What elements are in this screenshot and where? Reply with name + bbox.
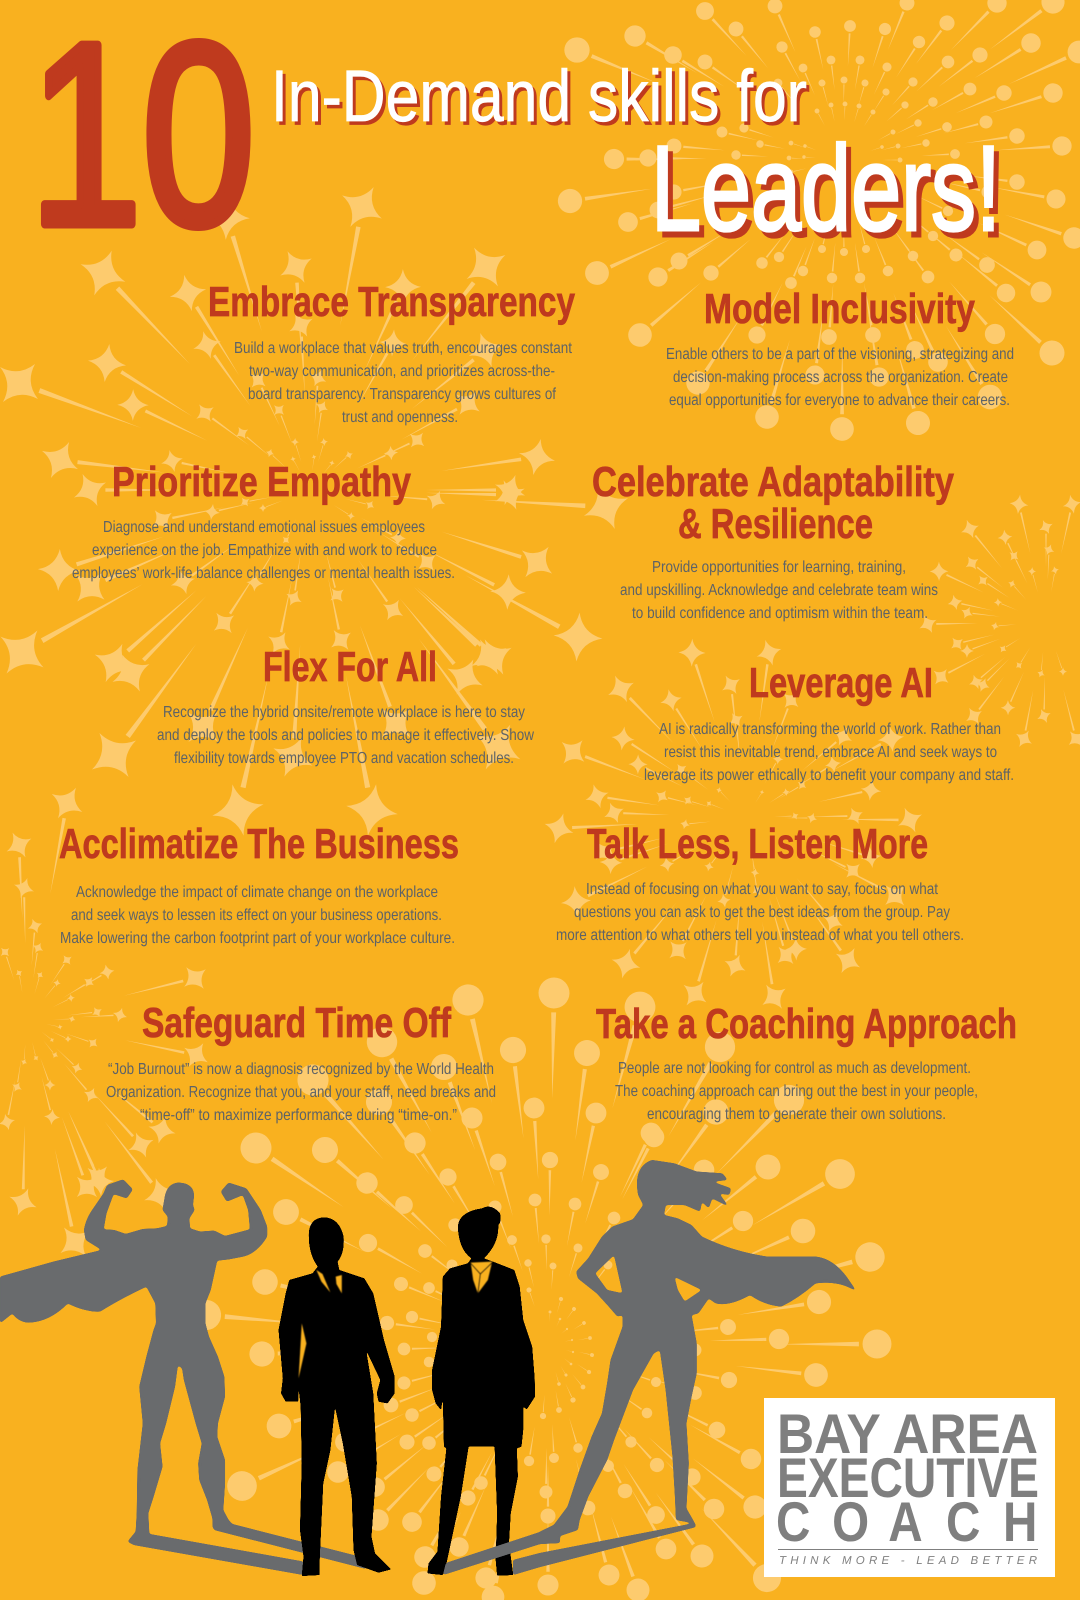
title: In-Demand skills for: In-Demand skills for [271, 56, 807, 137]
panel: Take a Coaching Approach [596, 1000, 1017, 1123]
panel: Model Inclusivity [666, 285, 1014, 409]
panel: Embrace Transparency: Embrace Transparency [208, 278, 576, 325]
logo: Bay Area Executive Coach: COACH [776, 1490, 1037, 1553]
panel: Talk Less, Listen More: Talk Less, Listen More [587, 820, 928, 867]
panel: Leverage AI: leverage its power ethically to benefit your company and staff. [644, 767, 1014, 784]
panel: Model Inclusivity: Model Inclusivity [704, 285, 976, 332]
panel: Prioritize Empathy [72, 458, 455, 582]
panel: Leverage AI [644, 659, 1014, 784]
panel: Acclimatize The Business: Make lowering the carbon footprint part of your workplace culture. [60, 930, 455, 947]
panel: Acclimatize The Business: Acknowledge the impact of climate change on the workplace [76, 884, 438, 901]
panel: Acclimatize The Business [59, 820, 459, 947]
panel: Take a Coaching Approach: encouraging them to generate their own solutions. [647, 1106, 946, 1123]
panel: Prioritize Empathy: Diagnose and understand emotional issues employees [103, 519, 425, 536]
dot burst: upper right [556, 0, 1080, 441]
panel: Embrace Transparency: Build a workplace that values truth, encourages constant [234, 340, 572, 357]
panel: Model Inclusivity: equal opportunities for everyone to advance their careers. [669, 392, 1010, 409]
panel: Acclimatize The Business: and seek ways to lessen its effect on your business operations. [71, 907, 442, 924]
panel: Prioritize Empathy: Prioritize Empathy [112, 458, 412, 505]
panel: Safeguard Time Off: Safeguard Time Off [142, 999, 452, 1046]
title: In-Demand skills for: In-Demand skills for [274, 60, 810, 140]
panel: Talk Less, Listen More [556, 820, 964, 944]
star burst: centre right [539, 630, 928, 1019]
panel: Embrace Transparency: board transparency. Transparency grows cultures of [248, 386, 556, 403]
panel: Safeguard Time Off: “time-off” to maximize performance during “time-on.” [140, 1107, 457, 1124]
panel: Safeguard Time Off: “Job Burnout” is now a diagnosis recognized by the World Health [108, 1061, 494, 1078]
panel: Embrace Transparency [208, 278, 576, 426]
panel: Take a Coaching Approach: The coaching approach can bring out the best in your people, [615, 1083, 978, 1100]
panel: Leverage AI: resist this inevitable trend, embrace AI and seek ways to [664, 744, 997, 761]
panel: Take a Coaching Approach: People are not looking for control as much as development. [618, 1060, 971, 1077]
icon: business man silhouette [279, 1217, 395, 1576]
logo: Bay Area Executive Coach [764, 1398, 1055, 1577]
panel: Safeguard Time Off: Organization. Recognize that you, and your staff, need breaks and [106, 1084, 496, 1101]
panel: Model Inclusivity: decision-making process across the organization. Create [673, 369, 1008, 386]
panel: Celebrate Adaptability and Resilience: Celebrate Adaptability [592, 458, 955, 505]
icon: business woman silhouette [427, 1207, 535, 1576]
icon: caped superhero man silhouette [0, 1179, 368, 1575]
panel: Flex For All: Recognize the hybrid onsite/remote workplace is here to stay [163, 704, 525, 721]
logo: Bay Area Executive Coach: THINK MORE - LEAD BETTER [779, 1555, 1037, 1567]
panel: Acclimatize The Business: Acclimatize The Business [59, 820, 459, 867]
panel: Prioritize Empathy: employees’ work-life balance challenges or mental health issues. [72, 565, 455, 582]
panel: Celebrate Adaptability and Resilience: & Resilience [678, 500, 873, 547]
panel: Flex For All [157, 643, 534, 767]
panel: Model Inclusivity: Enable others to be a part of the visioning, strategizing and [666, 346, 1014, 363]
panel: Celebrate Adaptability and Resilience: to build confidence and optimism within the team. [632, 605, 928, 622]
panel: Flex For All: Flex For All [263, 643, 437, 690]
star burst: left edge [0, 777, 217, 1271]
panel: Celebrate Adaptability and Resilience: and upskilling. Acknowledge and celebrate team wins [620, 582, 938, 599]
panel: Leverage AI: Leverage AI [749, 659, 933, 706]
panel: Prioritize Empathy: experience on the job. Empathize with and work to reduce [92, 542, 437, 559]
logo: Bay Area Executive Coach: BAY AREA [777, 1402, 1038, 1465]
panel: Talk Less, Listen More: questions you can ask to get the best ideas from the group. Pay [574, 904, 950, 921]
panel: Leverage AI: AI is radically transforming the world of work. Rather than [659, 721, 1001, 738]
icon: caped superhero woman silhouette [443, 1160, 857, 1575]
panel: Flex For All: and deploy the tools and policies to manage it effectively. Show [157, 727, 534, 744]
star burst: right edge [915, 489, 1080, 754]
panel: Talk Less, Listen More: more attention to what others tell you instead of what you tell others. [556, 927, 964, 944]
panel: Safeguard Time Off [106, 999, 496, 1124]
panel: Celebrate Adaptability and Resilience: Provide opportunities for learning, training, [652, 559, 906, 576]
panel: Flex For All: flexibility towards employee PTO and vacation schedules. [174, 750, 514, 767]
panel: Embrace Transparency: two-way communication, and prioritizes across-the- [249, 363, 555, 380]
star burst: upper left [0, 173, 639, 852]
panel: Embrace Transparency: trust and openness. [342, 409, 458, 426]
panel: Talk Less, Listen More: Instead of focusing on what you want to say, focus on what [586, 881, 938, 898]
panel: Celebrate Adaptability and Resilience [592, 458, 955, 622]
dot burst: bottom centre [190, 977, 892, 1600]
